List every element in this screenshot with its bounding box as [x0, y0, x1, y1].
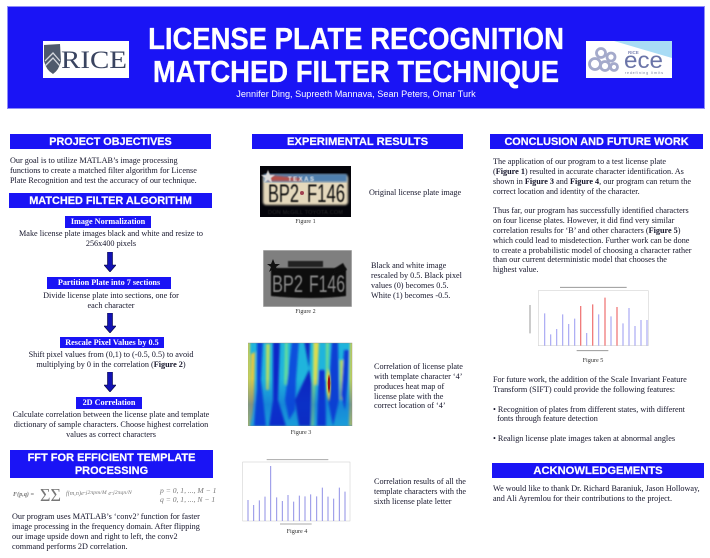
text: figure 2: Black and white image	[371, 261, 446, 270]
caption: figure 4: Figure 4	[287, 528, 307, 535]
acknowledgements text: and Ali Ayremlou for their contributions to the project.	[493, 494, 672, 503]
FFT text: Our program uses MATLAB’s ‘conv2’ function for faster	[12, 512, 200, 521]
arrow	[104, 313, 116, 333]
text: figure 4: template characters with the	[374, 487, 466, 496]
caption: figure 1: Figure 1	[295, 219, 316, 225]
text: figure 4	[374, 477, 466, 506]
text: figure 3: with template character ‘4’	[374, 372, 462, 381]
arrow	[104, 252, 116, 272]
equation: q = 0, 1, ..., N − 1	[160, 495, 215, 504]
text: figure 3: correct location of ‘4’	[374, 401, 446, 410]
heading: FFT	[10, 450, 213, 478]
panel: experimental results	[242, 134, 466, 535]
authors: Jennifer Ding, Supreeth Mannava, Sean Peters, Omar Turk	[236, 89, 476, 99]
future work text	[493, 375, 687, 443]
conclusion text: (Figure 1) resulted in accurate character identification. As	[493, 167, 684, 176]
text: figure 3: license plate with the	[374, 392, 443, 401]
heading: FFT: FFT FOR EFFICIENT TEMPLATE	[28, 452, 195, 464]
title: MATCHED FILTER TECHNIQUE	[153, 54, 559, 88]
FFT text: command performs 2D correlation.	[12, 542, 128, 551]
panel: matched filter algorithm	[9, 193, 212, 439]
step: partition plate: Partition Plate into 7 sections	[58, 278, 160, 287]
logo: Rice: RICE	[61, 47, 127, 74]
step text: Shift pixel values from (0,1) to (-0.5, 0.5) to avoid	[29, 350, 193, 359]
conclusion text: to create a probabilistic model of choosing a character rather	[493, 246, 691, 255]
objectives text: functions to create a matched filter algorithm for License	[10, 166, 197, 175]
step text	[19, 229, 203, 248]
conclusion text: which could lead to misdetection. Further work can be done	[493, 236, 689, 245]
logo: Rice ECE: redefining limits	[625, 71, 663, 75]
FFT text: our image upside down and right to left, the conv2	[12, 532, 178, 541]
step text: Divide license plate into sections, one for	[43, 291, 179, 300]
step text: Calculate correlation between the license plate and template	[13, 410, 209, 419]
future work text: • Recognition of plates from different states, with different	[493, 405, 685, 414]
heading: acknowledgements	[492, 463, 704, 478]
text: figure 2: rescaled by 0.5. Black pixel	[371, 271, 462, 280]
future work text: • Realign license plate images taken at abnormal angles	[493, 434, 675, 443]
arrow	[104, 372, 116, 392]
figure 3: correlation heat map	[248, 342, 352, 426]
step text: Make license plate images black and white and resize to	[19, 229, 203, 238]
step: rescale pixel values: Rescale Pixel Values by 0.5	[65, 338, 159, 347]
figure 1: license plate photo: DON McGILL TOYOTA.COM	[268, 210, 343, 216]
figure 2: black and white plate: BP2	[272, 271, 303, 298]
step: partition plate	[47, 277, 171, 289]
equation: p = 0, 1, ..., M − 1	[160, 486, 216, 495]
logo: Rice ECE: ece	[624, 47, 663, 73]
equation: f(m,n)e-j2πpm/M e-j2πqn/N	[66, 490, 132, 497]
heading: project objectives: PROJECT OBJECTIVES	[49, 136, 172, 148]
future work text: For future work, the addition of the Scale Invariant Feature	[493, 375, 687, 384]
text: figure 3: produces heat map of	[374, 382, 444, 391]
title: LICENSE PLATE RECOGNITION	[148, 22, 564, 56]
header banner	[8, 7, 704, 108]
figure 5: correlation stem chart	[530, 286, 649, 352]
heading: experimental results: EXPERIMENTAL RESULTS	[287, 136, 428, 148]
panel: FFT for efficient template processing	[10, 450, 216, 551]
step text: multiplying by 0 in the correlation (Figure 2)	[36, 360, 186, 369]
text: figure 3	[374, 362, 463, 410]
step: image normalization: Image Normalization	[71, 217, 145, 226]
figure 1: license plate photo: BP2	[268, 180, 299, 208]
step: 2D correlation: 2D Correlation	[83, 398, 135, 407]
step: 2D correlation	[76, 397, 142, 409]
conclusion text: correlation results for ‘B’ and other characters (Figure 5)	[493, 226, 680, 235]
objectives text	[10, 156, 197, 185]
conclusion text	[493, 157, 692, 274]
heading: experimental results	[252, 134, 463, 149]
caption: figure 2: Figure 2	[295, 309, 316, 315]
heading: acknowledgements: ACKNOWLEDGEMENTS	[533, 465, 663, 477]
logo: Rice ECE	[586, 41, 672, 78]
conclusion text: than our current deterministic model that chooses the	[493, 255, 667, 264]
heading: matched filter algorithm	[9, 193, 212, 208]
objectives text: Our goal is to utilize MATLAB’s image processing	[10, 156, 178, 165]
logo: Rice ECE: RICE	[628, 50, 639, 55]
step text: 256x400 pixels	[86, 239, 136, 248]
equation	[13, 485, 216, 505]
figure 1: license plate photo: TEXAS	[288, 177, 314, 183]
panel: acknowledgements	[492, 463, 704, 503]
text: figure 1: Original license plate image	[369, 188, 461, 197]
step text: values as correct characters	[66, 430, 156, 439]
future work text: fonts through feature detection	[497, 414, 598, 423]
caption: figure 5: Figure 5	[583, 357, 603, 364]
heading: project objectives	[10, 134, 211, 149]
step text	[29, 350, 194, 369]
conclusion text: on four license plates. However, it did find very similar	[493, 216, 674, 225]
logo: Rice	[43, 41, 129, 78]
equation: ΣΣ	[40, 485, 61, 505]
conclusion text: The application of our program to a test license plate	[493, 157, 666, 166]
step text	[13, 410, 209, 439]
conclusion text: highest value.	[493, 265, 538, 274]
acknowledgements text	[493, 484, 700, 503]
FFT text	[12, 512, 200, 551]
caption: figure 3: Figure 3	[291, 429, 311, 436]
heading: conclusion and future work	[490, 134, 703, 149]
step: image normalization	[65, 216, 151, 228]
conclusion text: Thus far, our program has successfully identified characters	[493, 206, 689, 215]
text: figure 2: values (0) becomes 0.5.	[371, 281, 449, 290]
heading: matched filter algorithm: MATCHED FILTER ALGORITHM	[29, 195, 192, 207]
objectives text: Plate Recognition and test the accuracy of our technique.	[10, 176, 197, 185]
acknowledgements text: We would like to thank Dr. Richard Baraniuk, Jason Holloway,	[493, 484, 700, 493]
figure 4: correlation stem chart	[242, 459, 350, 524]
heading: FFT: PROCESSING	[75, 465, 148, 477]
panel: conclusion and future work	[490, 134, 703, 443]
equation: F(p,q) =	[13, 491, 34, 498]
heading: conclusion and future work: CONCLUSION AND FUTURE WORK	[504, 136, 689, 148]
figure 2: black and white plate	[263, 250, 352, 307]
conclusion text: correct location and identity of the character.	[493, 187, 640, 196]
title	[148, 22, 564, 88]
figure 1: license plate photo	[260, 166, 351, 217]
step text: dictionary of sample characters. Choose highest correlation	[14, 420, 208, 429]
future work text: Transform (SIFT) could provide the following features:	[493, 385, 675, 394]
panel: project objectives	[10, 134, 211, 185]
conclusion text: shown in Figure 3 and Figure 4, our program can return the	[493, 177, 691, 186]
step text: each character	[87, 301, 135, 310]
text: figure 4: sixth license plate letter	[374, 497, 452, 506]
text: figure 2	[371, 261, 462, 300]
step text	[43, 291, 179, 310]
text: figure 4: Correlation results of all the	[374, 477, 466, 486]
text: figure 3: Correlation of license plate	[374, 362, 463, 371]
FFT text: image processing in the frequency domain. After flipping	[12, 522, 200, 531]
text: figure 2: White (1) becomes -0.5.	[371, 291, 450, 300]
